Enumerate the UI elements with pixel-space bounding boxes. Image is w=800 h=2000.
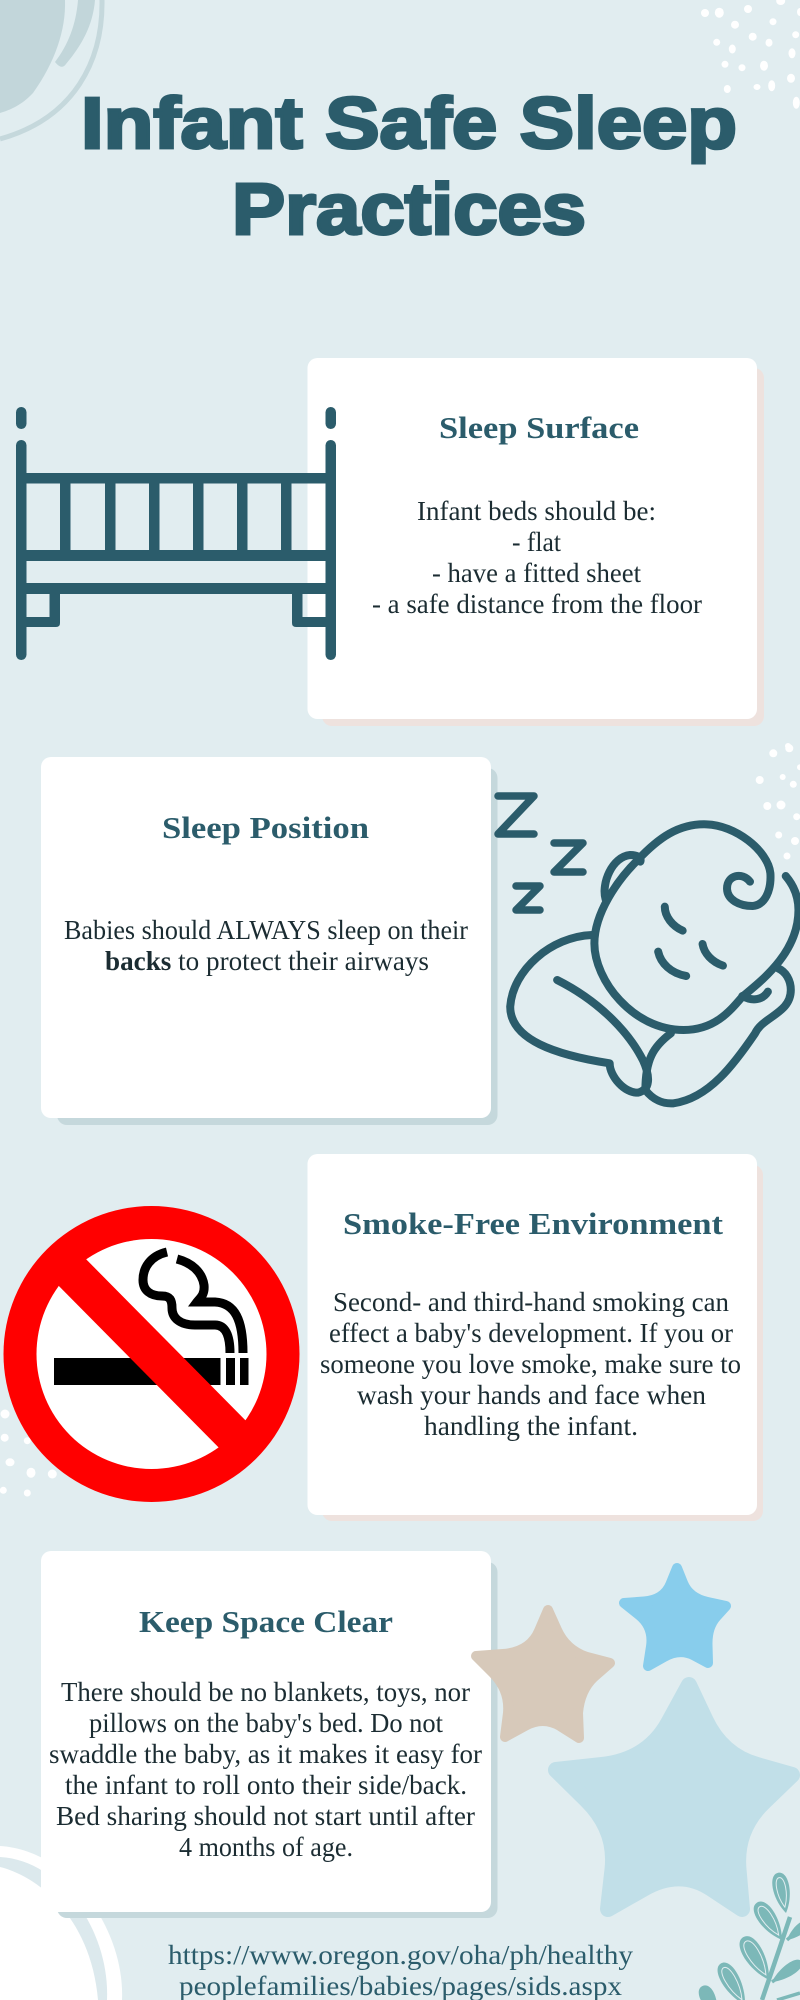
text: keep space clear body: the infant to roll onto their side/back.: [65, 1770, 467, 1800]
icon: sleeping baby: [498, 796, 798, 1103]
text: sleep surface body: [372, 496, 702, 619]
star: blue: [624, 1568, 726, 1666]
heading: smoke-free environment: Smoke-Free Environment: [343, 1206, 724, 1241]
title: Practices: [232, 170, 586, 250]
title: Infant Safe Sleep: [81, 84, 737, 164]
text: sleep surface body: - have a fitted sheet: [432, 558, 641, 588]
text: source url: https://www.oregon.gov/oha/ph/healthy: [168, 1940, 634, 1970]
text: smoke-free body: handling the infant.: [424, 1411, 638, 1441]
decoration: right-side dots: [756, 743, 800, 860]
decoration: leaf branch: [696, 1871, 800, 2000]
decoration: top-left brush circle: [0, 0, 102, 139]
text: sleep position body: Babies should ALWAYS sleep on their: [64, 915, 468, 945]
heading: sleep surface: Sleep Surface: [439, 410, 639, 445]
text: keep space clear body: [49, 1677, 482, 1862]
icon: no smoking sign: [4, 1206, 300, 1502]
text: keep space clear body: pillows on the baby's bed. Do not: [89, 1708, 443, 1738]
text: sleep surface body: - a safe distance from the floor: [372, 589, 702, 619]
panel: keep space clear: [41, 1551, 498, 1918]
icon: crib: [16, 407, 336, 660]
panel: smoke-free environment: [308, 1154, 763, 1521]
text: smoke-free body: someone you love smoke, make sure to: [320, 1349, 741, 1379]
text: sleep surface body: Infant beds should be:: [417, 496, 656, 526]
star: large light blue: [556, 1685, 792, 1909]
text: smoke-free body: Second- and third-hand smoking can: [333, 1287, 729, 1317]
text: keep space clear body: Bed sharing should not start until after: [56, 1801, 475, 1831]
title: [81, 84, 737, 250]
text: keep space clear body: 4 months of age.: [179, 1832, 353, 1862]
heading: keep space clear: Keep Space Clear: [139, 1604, 393, 1639]
text: sleep surface body: - flat: [512, 527, 561, 557]
text: sleep position body: [64, 915, 468, 976]
text: smoke-free body: effect a baby's development. If you or: [329, 1318, 733, 1348]
icon: z letters: [498, 796, 583, 910]
panel: sleep surface: [308, 358, 764, 726]
heading: sleep position: Sleep Position: [162, 810, 369, 845]
star: tan: [476, 1610, 610, 1738]
decoration: bottom-left white brush circle: [0, 1846, 122, 2000]
text: source url: [168, 1940, 634, 2000]
text: keep space clear body: There should be no blankets, toys, nor: [61, 1677, 470, 1707]
text: keep space clear body: swaddle the baby, as it makes it easy for: [49, 1739, 482, 1769]
text: sleep position body: backs to protect their airways: [105, 946, 429, 976]
text: smoke-free body: wash your hands and face when: [357, 1380, 706, 1410]
panel: sleep position: [41, 757, 498, 1125]
decoration: left-side dots: [0, 1410, 57, 1496]
text: smoke-free body: [320, 1287, 741, 1441]
decoration: top-right dots: [701, 0, 800, 109]
